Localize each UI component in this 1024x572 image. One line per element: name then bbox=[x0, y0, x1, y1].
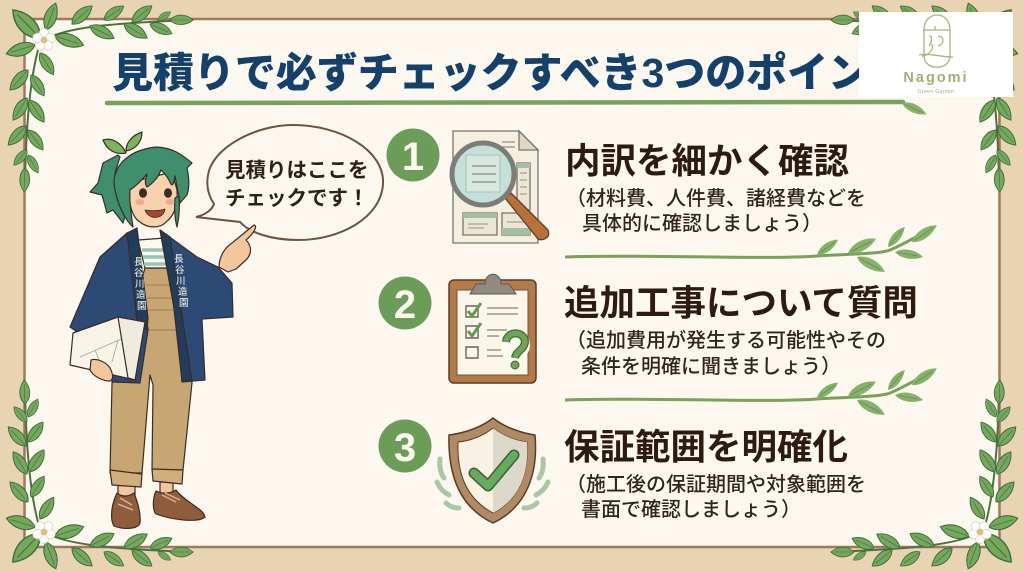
step 1 description: 具体的に確認しましょう） bbox=[582, 212, 822, 235]
title: 見積りで必ずチェックすべき3つのポイント bbox=[112, 50, 910, 96]
step 1 badge: 1 bbox=[402, 135, 424, 179]
corner vine: bottom left bbox=[4, 380, 193, 571]
speech bubble text: 見積りはここを bbox=[225, 159, 368, 182]
character: sketch pad bbox=[70, 317, 145, 380]
character: gardener in happi coat bbox=[70, 132, 256, 528]
character: collar text: 長 bbox=[134, 257, 144, 268]
character: collar text bbox=[134, 254, 189, 312]
character: leaf hair tie bbox=[103, 132, 142, 153]
character: ponytail bbox=[90, 155, 127, 223]
character: collar bands bbox=[127, 228, 192, 381]
step 2 heading: 追加工事について質問 bbox=[564, 283, 918, 323]
title underline bbox=[107, 99, 928, 118]
step 3 heading: 保証範囲を明確化 bbox=[564, 427, 848, 467]
speech bubble text: チェックです！ bbox=[225, 187, 368, 210]
character: collar text: 造 bbox=[136, 289, 146, 301]
divider sprig 2 bbox=[565, 364, 939, 419]
character: collar text: 川 bbox=[176, 276, 186, 287]
character: happi coat left bbox=[70, 232, 148, 383]
divider sprig 1 bbox=[565, 221, 939, 276]
step 1 description: （材料費、人件費、諸経費などを bbox=[566, 187, 866, 210]
character: face bbox=[130, 172, 177, 227]
character: trousers bbox=[110, 268, 192, 473]
step 2 badge bbox=[378, 276, 432, 330]
character: boots bbox=[112, 490, 205, 528]
character: collar text: 川 bbox=[135, 279, 145, 290]
corner vine: top left bbox=[4, 1, 193, 192]
icon: shield with check mark bbox=[437, 418, 548, 523]
logo tagline: Green Garden bbox=[918, 89, 954, 95]
step 3 description: （施工後の保証期間や対象範囲を bbox=[566, 473, 866, 496]
character: collar text: 園 bbox=[179, 298, 189, 309]
step 1 badge bbox=[386, 128, 440, 182]
character: eyes, cheeks and mouth bbox=[136, 188, 174, 217]
icon: document with magnifying glass bbox=[452, 131, 549, 243]
character: overalls bib seams bbox=[146, 285, 179, 330]
character: collar text: 長 bbox=[174, 254, 184, 265]
character: collar text: 園 bbox=[137, 301, 147, 312]
step 1 heading: 内訳を細かく確認 bbox=[565, 141, 849, 181]
character: pointing hand bbox=[219, 225, 256, 272]
step 3 badge bbox=[378, 420, 432, 472]
step 3 description: 書面で確認しましょう） bbox=[581, 498, 801, 521]
step 2 description: （追加費用が発生する可能性やその bbox=[566, 329, 886, 352]
logo wordmark: Nagomi bbox=[903, 70, 969, 86]
logo mark bbox=[919, 15, 953, 67]
step 3 badge: 3 bbox=[394, 426, 416, 470]
character: happi coat right bbox=[160, 230, 233, 382]
corner vine: bottom right bbox=[831, 380, 1020, 571]
character: trouser cuffs bbox=[110, 469, 183, 487]
step 2 badge: 2 bbox=[394, 283, 416, 327]
step 2 description: 条件を明確に聞きましょう） bbox=[581, 355, 841, 378]
character: striped shirt bbox=[138, 238, 172, 268]
icon: clipboard with question mark bbox=[449, 274, 536, 383]
character: collar text: 造 bbox=[178, 286, 188, 298]
character: hair bbox=[114, 147, 192, 227]
character: collar text: 谷 bbox=[134, 268, 144, 279]
logo card bbox=[859, 12, 1013, 97]
corner vine: top right bbox=[831, 1, 1020, 192]
character: left hand bbox=[90, 359, 113, 381]
speech bubble bbox=[196, 125, 383, 240]
character: collar text: 谷 bbox=[175, 265, 185, 276]
character: ankles bbox=[118, 482, 173, 496]
